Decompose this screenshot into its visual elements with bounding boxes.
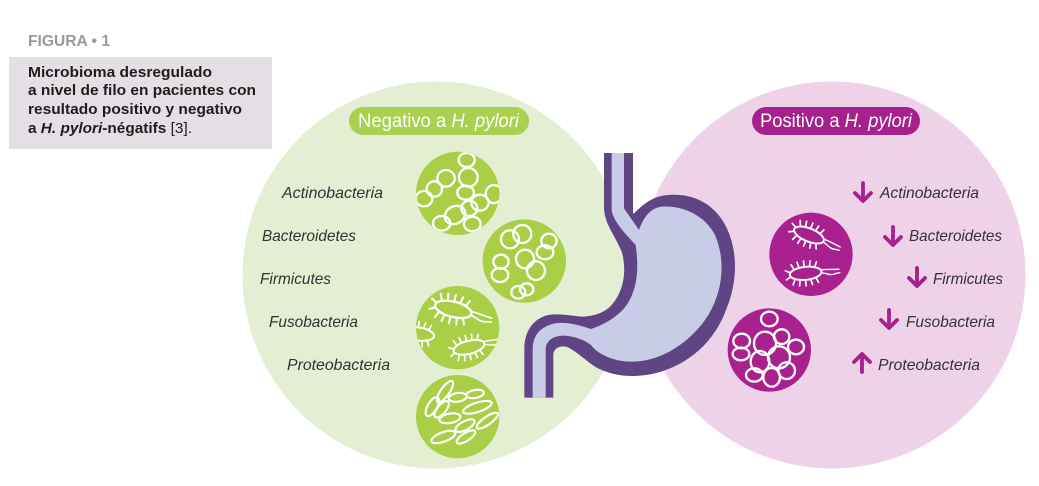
labels: negative phyla: Bacteroidetes	[262, 228, 356, 245]
caption box: Microbioma desregulado	[28, 64, 212, 81]
labels: negative phyla: Actinobacteria	[281, 185, 383, 202]
labels: positive phyla: Fusobacteria	[906, 314, 995, 331]
labels: negative phyla: Proteobacteria	[287, 357, 390, 374]
panel: negative H. pylori circle	[242, 82, 630, 468]
labels: positive phyla: Firmicutes	[933, 271, 1003, 288]
microbe circle: magenta bacteria	[769, 213, 853, 296]
microbe circle: green diplococci	[483, 219, 566, 303]
microbe circle: green cocci chains	[416, 152, 502, 235]
heading pill: negative: Negativo a H. pylori	[358, 111, 520, 132]
stomach illustration	[524, 153, 735, 398]
labels: positive phyla: Proteobacteria	[878, 357, 980, 374]
caption box	[9, 57, 272, 149]
heading pill: positive: Positivo a H. pylori	[760, 111, 913, 132]
microbe circle: green flagellated bacteria	[416, 286, 500, 370]
caption box: resultado positivo y negativo	[28, 101, 242, 118]
labels: positive phyla: Bacteroidetes	[909, 228, 1002, 245]
labels: positive phyla	[878, 185, 1003, 374]
labels: negative phyla: Fusobacteria	[269, 314, 358, 331]
figure label: FIGURA • 1	[28, 33, 110, 50]
labels: negative phyla	[260, 185, 390, 374]
panel: positive H. pylori circle	[638, 82, 1026, 468]
heading pill: negative	[349, 107, 529, 135]
heading pill: positive	[752, 107, 920, 135]
microbe circle: magenta cocci	[728, 308, 811, 392]
microbe circle: green rods	[416, 375, 500, 458]
arrows: positive phyla	[854, 183, 925, 372]
caption box: a H. pylori-négatifs [3].	[28, 120, 192, 137]
labels: positive phyla: Actinobacteria	[879, 185, 979, 202]
caption box: a nivel de filo en pacientes con	[28, 82, 256, 99]
labels: negative phyla: Firmicutes	[260, 271, 331, 288]
